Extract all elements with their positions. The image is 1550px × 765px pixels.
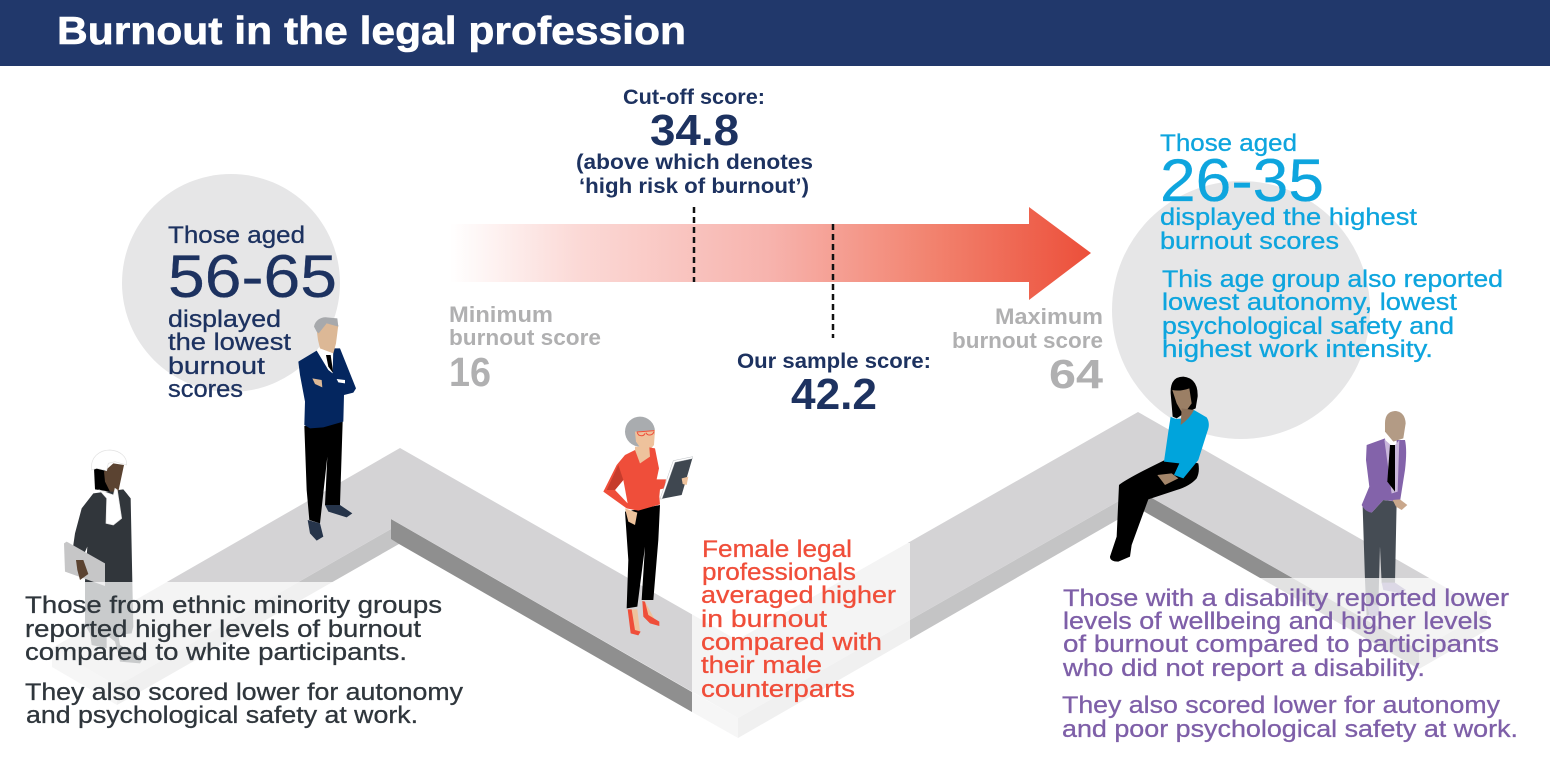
callout: cut-off score: ‘high risk of burnout’) <box>579 175 809 198</box>
text block: female legal professionals: in burnout <box>701 606 827 633</box>
callout: highest burnout age group: This age group also reported <box>1162 266 1503 293</box>
callout: highest burnout age group: Those aged <box>1160 130 1297 157</box>
text block: participants with a disability: who did not report a disability. <box>1062 655 1425 682</box>
callout: lowest burnout age group: 56-65 <box>168 243 337 310</box>
text block: ethnic minority groups: reported higher levels of burnout <box>25 616 421 643</box>
text block: participants with a disability: levels of wellbeing and higher levels <box>1063 608 1492 635</box>
callout: lowest burnout age group: Those aged <box>168 222 305 249</box>
figure: woman in red with tablet <box>603 417 693 635</box>
label: minimum burnout score: 16 <box>449 349 491 395</box>
callout: highest burnout age group <box>1160 130 1503 363</box>
callout: our sample score: 42.2 <box>791 370 877 419</box>
circle: lowest burnout background <box>122 174 340 392</box>
text block: female legal professionals: averaged higher <box>701 582 896 609</box>
callout: highest burnout age group: 26-35 <box>1160 147 1324 214</box>
callout: cut-off score <box>576 86 813 198</box>
text block: female legal professionals: their male <box>701 652 822 679</box>
text block: female legal professionals: compared with <box>701 629 882 656</box>
text block: female legal professionals: professionals <box>702 559 856 586</box>
text block: ethnic minority groups <box>25 592 463 729</box>
text block: ethnic minority groups: and psychological safety at work. <box>26 702 418 729</box>
marker: cut-off score dashed line <box>693 207 695 282</box>
callout: highest burnout age group: lowest autonomy, lowest <box>1162 289 1457 316</box>
text block: participants with a disability <box>1062 585 1518 743</box>
callout: lowest burnout age group <box>168 222 337 403</box>
overlay: right text backing <box>1050 578 1550 765</box>
label: maximum burnout score: Maximum <box>995 304 1103 329</box>
overlay: centre text backing <box>692 543 910 765</box>
text block: ethnic minority groups: Those from ethnic minority groups <box>25 592 442 619</box>
callout: lowest burnout age group: displayed <box>168 306 281 333</box>
figure: older man in navy suit <box>298 317 356 541</box>
circle: highest burnout background <box>1112 181 1370 439</box>
marker: sample score dashed line <box>832 224 834 338</box>
label: maximum burnout score: burnout score <box>952 328 1103 353</box>
callout: cut-off score: Cut-off score: <box>623 86 765 109</box>
text block: female legal professionals: counterparts <box>701 676 855 703</box>
callout: lowest burnout age group: the lowest <box>168 329 291 356</box>
isometric zigzag platform <box>52 412 1487 738</box>
text block: female legal professionals <box>701 536 896 703</box>
text block: participants with a disability: and poor psychological safety at work. <box>1062 716 1518 743</box>
text block: ethnic minority groups: They also scored lower for autonomy <box>25 679 463 706</box>
callout: lowest burnout age group: burnout <box>168 353 265 380</box>
arrow: burnout scale gradient <box>450 207 1091 300</box>
callout: our sample score: Our sample score: <box>737 350 931 373</box>
figure: seated woman in blue <box>1110 377 1209 562</box>
text block: participants with a disability: They also scored lower for autonomy <box>1062 692 1500 719</box>
text block: participants with a disability: of burnout compared to participants <box>1063 631 1499 658</box>
header banner <box>0 0 1550 66</box>
callout: our sample score <box>737 350 931 419</box>
callout: highest burnout age group: displayed the highest <box>1160 204 1417 231</box>
callout: highest burnout age group: psychological safety and <box>1162 313 1454 340</box>
label: maximum burnout score <box>952 304 1103 397</box>
text block: female legal professionals: Female legal <box>702 536 852 563</box>
label: minimum burnout score <box>449 302 601 395</box>
overlay: left text backing <box>0 582 465 765</box>
callout: highest burnout age group: burnout scores <box>1160 228 1339 255</box>
label: minimum burnout score: Minimum <box>449 302 553 327</box>
callout: lowest burnout age group: scores <box>168 376 243 403</box>
label: maximum burnout score: 64 <box>1049 351 1103 397</box>
figure: judge with wig and folder <box>64 450 143 663</box>
text block: participants with a disability: Those with a disability reported lower <box>1063 585 1509 612</box>
callout: cut-off score: 34.8 <box>650 106 739 155</box>
label: minimum burnout score: burnout score <box>449 325 601 350</box>
figure: man in purple jacket <box>1362 411 1407 617</box>
callout: cut-off score: (above which denotes <box>576 151 813 174</box>
callout: highest burnout age group: highest work intensity. <box>1162 336 1433 363</box>
text block: ethnic minority groups: compared to white participants. <box>25 639 407 666</box>
title: Burnout in the legal profession <box>57 10 686 53</box>
